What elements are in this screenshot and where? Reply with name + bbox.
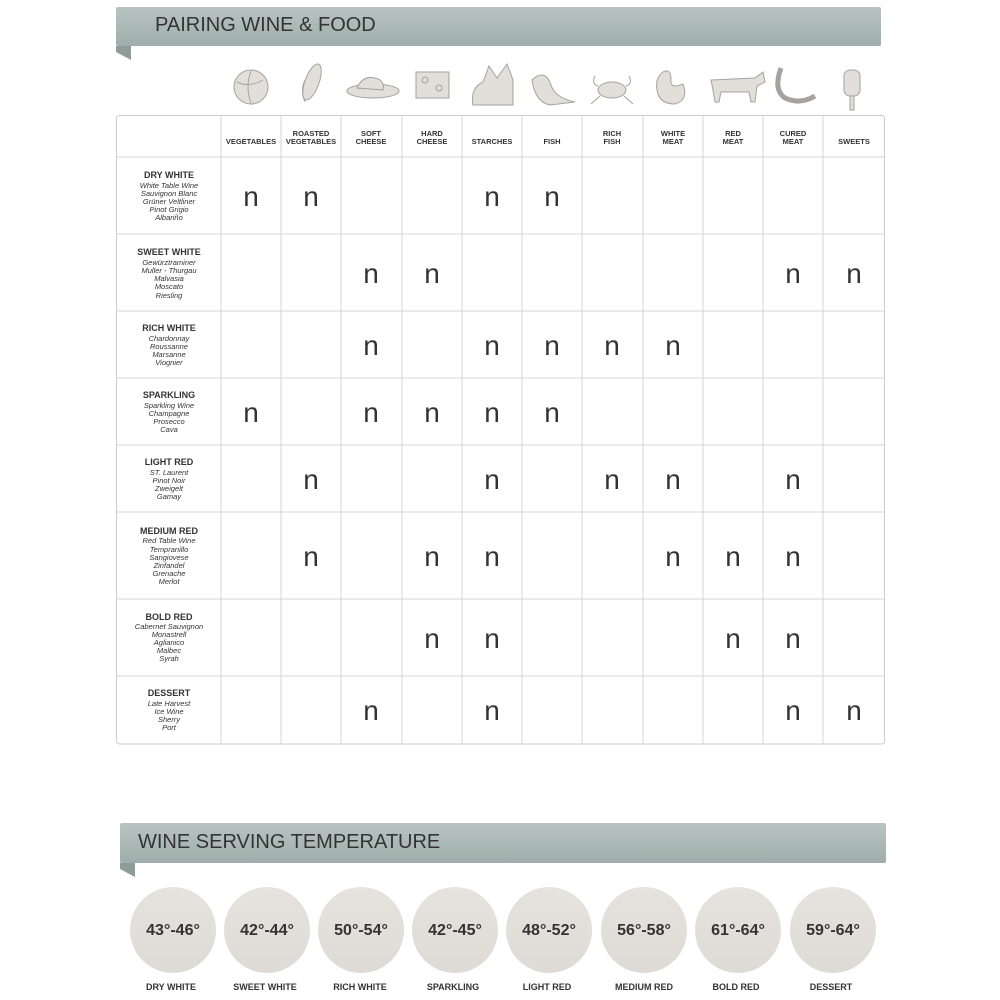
pairing marks: n bbox=[484, 397, 500, 428]
pairing marks: n bbox=[725, 541, 741, 572]
wine row labels: Sauvignon Blanc bbox=[141, 189, 197, 198]
wine row labels: Marsanne bbox=[152, 350, 186, 359]
title: PAIRING WINE & FOOD bbox=[155, 14, 376, 36]
wine row labels: BOLD RED bbox=[146, 612, 193, 622]
pairing marks: n bbox=[785, 258, 801, 289]
column headers: RICH bbox=[603, 129, 621, 138]
pairing marks: n bbox=[484, 541, 500, 572]
temperature circles bbox=[130, 887, 876, 992]
column headers: HARD bbox=[421, 129, 443, 138]
pairing marks: n bbox=[604, 330, 620, 361]
column headers: SOFT bbox=[361, 129, 381, 138]
column headers: WHITE bbox=[661, 129, 685, 138]
column headers: SWEETS bbox=[838, 137, 870, 146]
wine row labels: Moscato bbox=[155, 282, 183, 291]
wine row labels: DESSERT bbox=[148, 688, 191, 698]
icon: popsicle bbox=[844, 70, 860, 110]
temperature circles: 42°-45° bbox=[428, 922, 482, 939]
temperature circles: 59°-64° bbox=[806, 922, 860, 939]
wine row labels: Pinot Noir bbox=[153, 476, 186, 485]
column headers: MEAT bbox=[783, 137, 804, 146]
wine row labels: Muller - Thurgau bbox=[141, 266, 197, 275]
pairing marks: n bbox=[303, 464, 319, 495]
pairing marks: n bbox=[424, 541, 440, 572]
wine row labels: Grüner Veltliner bbox=[143, 197, 196, 206]
food icons row bbox=[234, 63, 860, 110]
pairing marks: n bbox=[363, 330, 379, 361]
temperature circles: SWEET WHITE bbox=[233, 982, 297, 992]
wine row labels: Cabernet Sauvignon bbox=[135, 622, 203, 631]
pairing marks: n bbox=[363, 258, 379, 289]
temperature circles: BOLD RED bbox=[712, 982, 760, 992]
wine row labels: DRY WHITE bbox=[144, 170, 194, 180]
temperature circles: 56°-58° bbox=[617, 922, 671, 939]
pairing marks: n bbox=[665, 541, 681, 572]
column headers: CURED bbox=[780, 129, 807, 138]
column headers: STARCHES bbox=[472, 137, 512, 146]
wine row labels: LIGHT RED bbox=[145, 457, 194, 467]
temperature circles: DRY WHITE bbox=[146, 982, 196, 992]
wine row labels: Red Table Wine bbox=[142, 536, 196, 545]
pairing marks: n bbox=[303, 541, 319, 572]
wine row labels: Merlot bbox=[159, 577, 180, 586]
icon: hard cheese bbox=[416, 72, 449, 98]
wine row labels: Malvasia bbox=[154, 274, 184, 283]
wine row labels: Roussanne bbox=[150, 342, 188, 351]
column headers: ROASTED bbox=[293, 129, 330, 138]
wine row labels: MEDIUM RED bbox=[140, 526, 198, 536]
column headers: VEGETABLES bbox=[226, 137, 276, 146]
pairing marks: n bbox=[665, 330, 681, 361]
wine row labels: Chardonnay bbox=[149, 334, 191, 343]
wine row labels: White Table Wine bbox=[140, 181, 198, 190]
pairing marks: n bbox=[544, 181, 560, 212]
column headers: CHEESE bbox=[417, 137, 447, 146]
temperature circles: MEDIUM RED bbox=[615, 982, 673, 992]
pairing marks: n bbox=[604, 464, 620, 495]
wine row labels: Pinot Grigio bbox=[149, 205, 189, 214]
title: WINE SERVING TEMPERATURE bbox=[138, 831, 440, 853]
wine row labels: Sparkling Wine bbox=[144, 401, 194, 410]
icon: sausage bbox=[778, 68, 815, 101]
icon: rooster bbox=[657, 71, 685, 104]
wine row labels: ST. Laurent bbox=[150, 468, 189, 477]
pairing marks: n bbox=[424, 258, 440, 289]
column headers: FISH bbox=[603, 137, 621, 146]
temperature circles: 50°-54° bbox=[334, 922, 388, 939]
temperature circles: 43°-46° bbox=[146, 922, 200, 939]
pairing marks: n bbox=[424, 397, 440, 428]
wine row labels: RICH WHITE bbox=[142, 323, 196, 333]
wine row labels: Late Harvest bbox=[148, 699, 191, 708]
pairing marks: n bbox=[484, 181, 500, 212]
icon: soft cheese bbox=[347, 77, 399, 98]
wine row labels: Albariño bbox=[154, 213, 183, 222]
pairing marks: n bbox=[785, 623, 801, 654]
pairing marks: n bbox=[424, 623, 440, 654]
pairing marks: n bbox=[665, 464, 681, 495]
pairing marks: n bbox=[484, 330, 500, 361]
temperature circles: 42°-44° bbox=[240, 922, 294, 939]
pairing marks: n bbox=[544, 330, 560, 361]
wine row labels: Gamay bbox=[157, 492, 182, 501]
column headers: FISH bbox=[543, 137, 561, 146]
column headers: CHEESE bbox=[356, 137, 386, 146]
pairing marks bbox=[243, 181, 862, 726]
wine row labels: Tempranillo bbox=[150, 545, 188, 554]
pairing marks: n bbox=[363, 397, 379, 428]
pairing marks: n bbox=[484, 464, 500, 495]
temperature circles: DESSERT bbox=[810, 982, 853, 992]
pairing marks: n bbox=[785, 695, 801, 726]
wine row labels: Champagne bbox=[149, 409, 189, 418]
pairing marks: n bbox=[303, 181, 319, 212]
icon: starches (pig) bbox=[472, 64, 513, 105]
pairing marks: n bbox=[846, 695, 862, 726]
wine row labels: Malbec bbox=[157, 646, 181, 655]
wine row labels: Sherry bbox=[158, 715, 181, 724]
temperature circles: SPARKLING bbox=[427, 982, 479, 992]
column headers: VEGETABLES bbox=[286, 137, 336, 146]
icon: crab bbox=[591, 76, 633, 104]
pairing marks: n bbox=[243, 181, 259, 212]
wine row labels: Cava bbox=[160, 425, 178, 434]
temperature circles: LIGHT RED bbox=[523, 982, 572, 992]
pairing marks: n bbox=[725, 623, 741, 654]
wine row labels: Viognier bbox=[155, 358, 183, 367]
wine row labels: SWEET WHITE bbox=[137, 247, 201, 257]
banner: wine serving temperature bbox=[120, 823, 886, 877]
column headers: MEAT bbox=[723, 137, 744, 146]
wine row labels: Aglianico bbox=[153, 638, 184, 647]
pairing marks: n bbox=[785, 541, 801, 572]
wine row labels: Ice Wine bbox=[154, 707, 184, 716]
wine row labels bbox=[135, 170, 203, 732]
banner: pairing wine & food bbox=[116, 7, 881, 60]
pairing marks: n bbox=[785, 464, 801, 495]
pairing marks: n bbox=[544, 397, 560, 428]
column headers bbox=[226, 129, 870, 146]
wine row labels: Riesling bbox=[156, 291, 183, 300]
temperature circles: RICH WHITE bbox=[333, 982, 387, 992]
column headers: MEAT bbox=[663, 137, 684, 146]
wine row labels: Port bbox=[162, 723, 177, 732]
wine row labels: Sangiovese bbox=[149, 553, 189, 562]
icon: fish bbox=[532, 75, 575, 105]
icon: cow bbox=[711, 72, 765, 102]
wine row labels: Zweigelt bbox=[154, 484, 184, 493]
pairing marks: n bbox=[484, 623, 500, 654]
pairing marks: n bbox=[846, 258, 862, 289]
wine row labels: SPARKLING bbox=[143, 390, 195, 400]
temperature circles: 48°-52° bbox=[522, 922, 576, 939]
wine row labels: Monastrell bbox=[152, 630, 187, 639]
pairing marks: n bbox=[484, 695, 500, 726]
pairing marks: n bbox=[363, 695, 379, 726]
temperature circles: 61°-64° bbox=[711, 922, 765, 939]
icon: corn bbox=[299, 62, 325, 102]
icon: cabbage bbox=[234, 70, 268, 104]
pairing marks: n bbox=[243, 397, 259, 428]
wine row labels: Gewürztraminer bbox=[142, 258, 196, 267]
column headers: RED bbox=[725, 129, 741, 138]
wine row labels: Prosecco bbox=[153, 417, 185, 426]
wine row labels: Syrah bbox=[159, 654, 179, 663]
wine row labels: Grenache bbox=[153, 569, 185, 578]
pairing table bbox=[116, 115, 885, 744]
wine row labels: Zinfandel bbox=[153, 561, 185, 570]
